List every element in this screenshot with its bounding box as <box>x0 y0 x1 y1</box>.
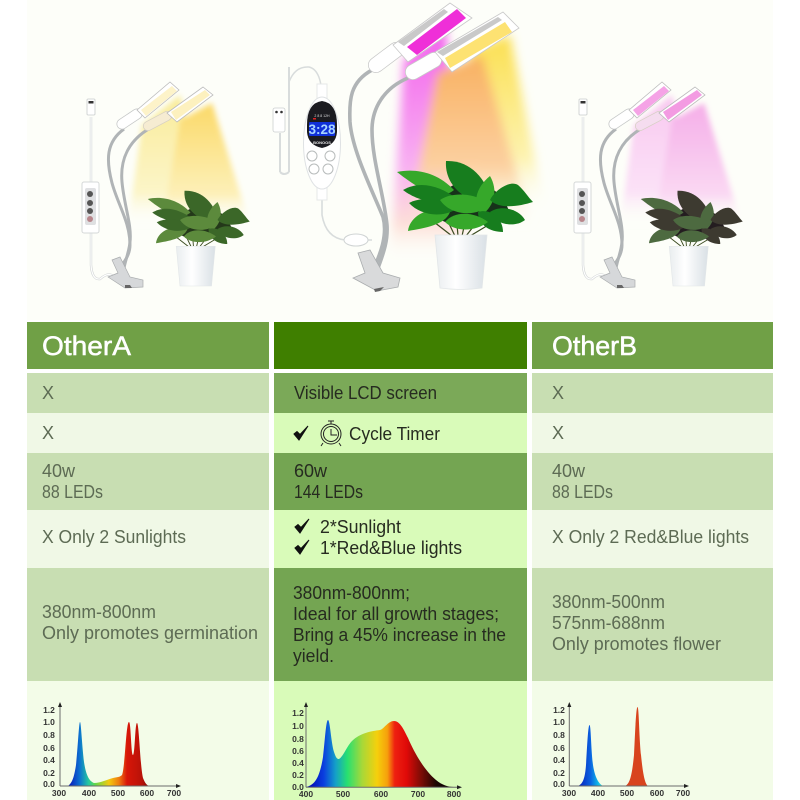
row: spectrum chart A: 400 <box>82 788 96 798</box>
row: spectrum chart A: 300 <box>52 788 66 798</box>
row: LCD <box>532 373 773 413</box>
row: power: 88 LEDs <box>552 482 613 502</box>
row: LCD: Visible LCD screen <box>294 383 437 403</box>
row: timer <box>274 413 527 453</box>
plant <box>397 161 533 290</box>
row: spectrum chart: 400 <box>299 789 313 799</box>
row: spectrum text: 575nm-688nm <box>552 613 665 633</box>
row: spectrum chart B: 1.2 <box>553 705 565 715</box>
row: spectrum text: 380nm-500nm <box>552 592 665 612</box>
plant <box>641 191 743 286</box>
row: power: 60w <box>294 461 328 481</box>
row: spectrum chart B: 1.0 <box>553 717 565 727</box>
product: middle lamp with LCD controller <box>273 3 545 292</box>
row: spectrum chart A: 0.6 <box>43 743 55 753</box>
row: lights <box>532 510 773 568</box>
row: spectrum chart: 500 <box>336 789 350 799</box>
row: spectrum text: Ideal for all growth stages; <box>293 604 499 624</box>
icon: check <box>294 426 308 440</box>
row: spectrum chart A: 1.2 <box>43 705 55 715</box>
row: lights: 2*Sunlight <box>320 517 401 537</box>
row: spectrum chart A: 500 <box>111 788 125 798</box>
row: spectrum chart B: 400 <box>591 788 605 798</box>
light beams: red and blue <box>620 95 742 225</box>
row: spectrum chart A: 600 <box>140 788 154 798</box>
icon: check <box>295 519 309 533</box>
row: power <box>532 453 773 510</box>
row: spectrum chart: 700 <box>411 789 425 799</box>
row: spectrum chart: 0.8 <box>292 734 304 744</box>
row: spectrum chart B: 500 <box>620 788 634 798</box>
row: spectrum text: yield. <box>293 646 334 666</box>
row: LCD: X <box>42 383 54 403</box>
row: spectrum text: Bring a 45% increase in the <box>293 625 506 645</box>
row: spectrum chart: 0.6 <box>292 746 304 756</box>
row: LCD <box>274 373 527 413</box>
row: lights <box>274 510 527 568</box>
row: power: 40w <box>552 461 586 481</box>
lamp head: red and blue <box>376 3 472 65</box>
row: power: 88 LEDs <box>42 482 103 502</box>
row: spectrum chart: 600 <box>374 789 388 799</box>
icon: clock <box>321 421 341 446</box>
lamp head: sunlight <box>413 12 519 72</box>
row: spectrum chart A: 0.4 <box>43 755 55 765</box>
row: spectrum chart A <box>27 681 269 800</box>
row: spectrum text <box>27 568 269 681</box>
table column: OtherB <box>532 322 773 800</box>
row: spectrum chart A: 0.0 <box>43 779 55 789</box>
row: spectrum text <box>274 568 527 681</box>
row: timer: X <box>42 423 54 443</box>
row: power <box>274 453 527 510</box>
gooseneck arms <box>350 70 408 270</box>
row: lights: X Only 2 Sunlights <box>42 527 186 547</box>
row: spectrum chart: 1.2 <box>292 708 304 718</box>
LCD controller: 2 8 8 12H <box>314 114 330 118</box>
row: timer <box>532 413 773 453</box>
light beams: full spectrum <box>390 25 545 260</box>
table column: OtherA <box>27 322 269 800</box>
row: spectrum chart B: 300 <box>562 788 576 798</box>
row: spectrum text: Only promotes germination <box>42 623 258 643</box>
row: spectrum chart: 0.2 <box>292 770 304 780</box>
photo background <box>27 0 773 320</box>
row: spectrum text: Only promotes flower <box>552 634 721 654</box>
header: OtherA: OtherA <box>42 331 131 361</box>
product: other lamp B with pink light <box>574 82 743 288</box>
row: spectrum chart: 1.0 <box>292 721 304 731</box>
row: spectrum chart A: 700 <box>167 788 181 798</box>
table column: highlighted product <box>274 322 527 800</box>
row: spectrum text: 380nm-800nm; <box>293 583 410 603</box>
row: lights: X Only 2 Red&Blue lights <box>552 527 749 547</box>
LCD controller <box>304 84 340 200</box>
product: other lamp A with warm light <box>82 82 250 288</box>
row: lights: 1*Red&Blue lights <box>320 538 462 558</box>
row: spectrum chart B: 700 <box>676 788 690 798</box>
row: lights <box>27 510 269 568</box>
row: spectrum chart A: 0.2 <box>43 768 55 778</box>
icon: check <box>295 540 309 554</box>
row: spectrum chart <box>274 681 527 800</box>
LCD controller: 3:28 <box>308 122 336 137</box>
row: timer: Cycle Timer <box>349 424 440 444</box>
row: power: 40w <box>42 461 76 481</box>
row: power <box>27 453 269 510</box>
header: OtherB <box>532 322 773 369</box>
row: spectrum chart B: 0.4 <box>553 755 565 765</box>
row: spectrum chart: 0.4 <box>292 758 304 768</box>
USB cord <box>273 67 372 246</box>
row: spectrum chart B: 0.0 <box>553 779 565 789</box>
row: power: 144 LEDs <box>294 482 363 502</box>
row: spectrum text <box>532 568 773 681</box>
row: timer: X <box>552 423 564 443</box>
header: OtherA <box>27 322 269 369</box>
row: spectrum chart B: 0.8 <box>553 730 565 740</box>
header: empty <box>274 322 527 369</box>
row: spectrum chart: 800 <box>447 789 461 799</box>
row: timer <box>27 413 269 453</box>
row: spectrum chart A: 1.0 <box>43 717 55 727</box>
row: spectrum chart B: 600 <box>650 788 664 798</box>
row: LCD: X <box>552 383 564 403</box>
plant <box>148 191 250 286</box>
row: spectrum chart A: 0.8 <box>43 730 55 740</box>
row: LCD <box>27 373 269 413</box>
row: spectrum text: 380nm-800nm <box>42 602 156 622</box>
row: spectrum chart: 0.0 <box>292 782 304 792</box>
row: spectrum chart B: 0.2 <box>553 768 565 778</box>
header: OtherB: OtherB <box>552 331 637 361</box>
LCD controller: BONOOS <box>313 140 331 145</box>
row: spectrum chart B <box>532 681 773 800</box>
row: spectrum chart B: 0.6 <box>553 743 565 753</box>
light beams: sunlight <box>128 95 250 225</box>
clamp <box>353 250 400 292</box>
